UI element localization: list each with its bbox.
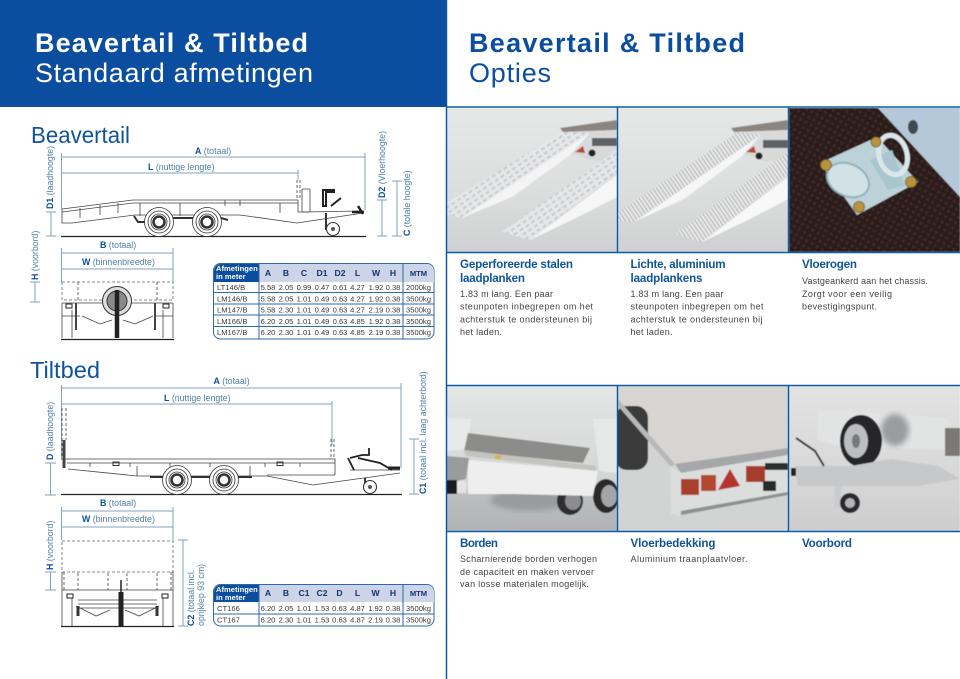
table: beavertail dimensions: A [265, 268, 271, 278]
option text: perforated steel ramps: het laden. [460, 327, 502, 337]
table: beavertail dimensions: 2000kg [406, 283, 431, 292]
table: beavertail dimensions: 0.49 [315, 328, 329, 337]
table: beavertail dimensions: C [301, 268, 307, 278]
option text: front board: Voorbord [802, 537, 852, 550]
tiltbed dimension labels: L (nuttige lengte) [164, 393, 231, 403]
table: beavertail dimensions: LM147/B [217, 306, 247, 314]
option text: floor covering: Aluminium traanplaatvloer. [630, 554, 748, 564]
dimension labels: D2 (Vloerhoogte) [377, 131, 387, 198]
table: beavertail dimensions: MTM [410, 269, 427, 278]
left header band: Beavertail & Tiltbed [35, 28, 308, 58]
table: beavertail dimensions: Afmetingen [216, 264, 258, 273]
table: beavertail dimensions: LM166/B [217, 317, 247, 326]
option text: perforated steel ramps: laadplanken [460, 272, 525, 285]
option text: perforated steel ramps: steunpoten inbegrepen om het [460, 302, 593, 312]
table: beavertail dimensions: LT146/B [217, 283, 245, 292]
table: beavertail dimensions: 0.63 [333, 317, 347, 326]
table: beavertail dimensions: 4.27 [350, 306, 365, 314]
option text: aluminium ramps: laadplankens [630, 272, 702, 285]
table: beavertail dimensions: 0.63 [333, 294, 347, 304]
tiltbed dimension labels: A (totaal) [214, 376, 250, 386]
side view dimension lines [30, 153, 402, 302]
heading: Tiltbed: Tiltbed [30, 357, 100, 383]
table: beavertail dimensions: 1.92 [369, 283, 383, 292]
table: tiltbed dimensions: 6.20 [261, 616, 275, 624]
table: tiltbed dimensions: C1 [298, 588, 310, 598]
tiltbed dimension labels: oprijklep 93 cm) [196, 564, 206, 626]
photo: aluminium ramps [618, 108, 788, 252]
table: tiltbed dimensions: 1.01 [297, 616, 311, 624]
table: tiltbed dimensions: 3500kg [406, 604, 431, 613]
tiltbed dimension labels: C2 (totaal incl. [186, 570, 196, 626]
option text: floor covering: Vloerbedekking [630, 537, 716, 550]
option text: floor eyes: Vloerogen [802, 258, 857, 271]
table: beavertail dimensions: 1.92 [369, 317, 383, 326]
option text: perforated steel ramps: 1.83 m lang. Een paar [460, 289, 553, 299]
left header band: Standaard afmetingen [35, 58, 313, 88]
table: beavertail dimensions: 0.49 [315, 317, 329, 326]
table: beavertail dimensions: 0.47 [315, 283, 329, 292]
table: tiltbed dimensions: W [371, 588, 380, 598]
heading: Beavertail: Beavertail [31, 122, 130, 148]
panel: beavertail dimensions [30, 122, 434, 340]
table: beavertail dimensions: 1.01 [297, 294, 311, 304]
table: beavertail dimensions: 0.38 [386, 317, 400, 326]
tiltbed dimension labels: C1 (totaal incl. laag achterbord) [418, 371, 428, 494]
table: beavertail dimensions: 1.01 [297, 317, 311, 326]
table: tiltbed dimensions: 4.87 [350, 616, 365, 624]
table: beavertail dimensions: 0.49 [315, 294, 329, 304]
table: tiltbed dimensions: H [390, 588, 396, 598]
option text: floor eyes: Vastgeankerd aan het chassis. [802, 276, 928, 286]
table: tiltbed dimensions: MTM [410, 589, 427, 598]
diagram: beavertail rear view [61, 282, 174, 340]
option text: aluminium ramps: steunpoten inbegrepen om het [630, 302, 764, 312]
table: beavertail dimensions: 4.27 [350, 294, 365, 304]
table: beavertail dimensions: 3500kg [406, 317, 431, 326]
option text: aluminium ramps: 1.83 m lang. Een paar [630, 289, 724, 299]
table: beavertail dimensions: 2.19 [369, 328, 383, 337]
table: beavertail dimensions: 2.05 [279, 294, 293, 304]
table: beavertail dimensions: H [390, 268, 396, 278]
table: beavertail dimensions: 3500kg [406, 306, 431, 314]
table: tiltbed dimensions: 0.63 [332, 616, 347, 624]
table: tiltbed dimensions: 0.38 [386, 616, 400, 624]
table: tiltbed dimensions: 3500kg [406, 616, 431, 624]
table: tiltbed dimensions: C2 [316, 588, 328, 598]
table: beavertail dimensions: 2.05 [279, 283, 293, 292]
table: beavertail dimensions: B [283, 268, 289, 278]
table: beavertail dimensions: D1 [316, 268, 328, 278]
table: beavertail dimensions: 1.01 [297, 328, 311, 337]
table: beavertail dimensions: W [372, 268, 381, 278]
table: tiltbed dimensions: D [336, 588, 343, 598]
option text: floor covering [630, 537, 748, 564]
table: tiltbed dimensions: 2.30 [279, 616, 293, 624]
table: beavertail dimensions: 0.38 [386, 283, 400, 292]
table: beavertail dimensions: 0.38 [386, 328, 400, 337]
right header title [469, 28, 745, 88]
photo frame lines [446, 0, 960, 679]
dimension labels [30, 131, 412, 280]
option text: side boards: Borden [460, 537, 498, 550]
table: tiltbed dimensions: 1.53 [315, 604, 329, 613]
left header band [0, 0, 446, 107]
table: beavertail dimensions: 6.20 [261, 317, 275, 326]
table: tiltbed dimensions: Afmetingen [216, 585, 258, 594]
option text: perforated steel ramps: Geperforeerde stalen [460, 258, 573, 271]
table: beavertail dimensions: 6.20 [261, 328, 275, 337]
table: beavertail dimensions [214, 264, 434, 339]
photo: floor eye [789, 107, 960, 252]
option text: floor eyes [802, 258, 928, 312]
table: beavertail dimensions: 2.19 [369, 306, 383, 314]
table: tiltbed dimensions: A [265, 588, 271, 598]
table: tiltbed dimensions: 2.05 [279, 604, 293, 613]
table: beavertail dimensions: 0.49 [315, 306, 329, 314]
option text: aluminium ramps: het laden. [630, 327, 672, 337]
option text: floor eyes: Zorgt voor een veilig [802, 289, 892, 299]
option text: aluminium ramps [630, 258, 764, 337]
option text: perforated steel ramps: achterstuk te ondersteunen bij [460, 314, 592, 324]
panel: tiltbed dimensions [30, 357, 434, 626]
table: beavertail dimensions: 2.30 [279, 306, 293, 314]
table: tiltbed dimensions: 1.53 [315, 616, 329, 624]
table: beavertail dimensions: 2.05 [279, 317, 293, 326]
table: beavertail dimensions: 0.38 [386, 294, 400, 304]
table: beavertail dimensions: 0.61 [333, 283, 347, 292]
table: beavertail dimensions: 5.58 [261, 294, 275, 304]
option text: aluminium ramps: Lichte, aluminium [630, 258, 726, 271]
table: beavertail dimensions: 3500kg [406, 328, 431, 337]
table: beavertail dimensions: L [355, 268, 360, 278]
table: beavertail dimensions: 5.58 [261, 283, 275, 292]
tiltbed dimension labels: D (laadhoogte) [45, 402, 55, 460]
dimension labels: L (nuttige lengte) [148, 162, 215, 172]
tiltbed dimension labels: H (voorbord) [45, 521, 55, 570]
table: tiltbed dimensions: CT167 [217, 616, 240, 624]
right header title: Beavertail & Tiltbed [469, 28, 745, 58]
table: beavertail dimensions: LM146/B [217, 294, 247, 304]
option text: aluminium ramps: achterstuk te ondersteunen bij [630, 314, 762, 324]
table: beavertail dimensions: LM167/B [217, 328, 247, 337]
right header title: Opties [469, 58, 551, 88]
table: beavertail dimensions: 1.01 [297, 306, 311, 314]
table: tiltbed dimensions: 4.87 [350, 604, 365, 613]
option text: side boards [460, 537, 597, 589]
photo: front board with spare wheel [789, 386, 960, 531]
table: tiltbed dimensions: 6.20 [261, 604, 275, 613]
table: beavertail dimensions: D2 [334, 268, 346, 278]
table: tiltbed dimensions: 2.19 [368, 616, 383, 624]
option text: side boards: Scharnierende borden verhogen [460, 554, 597, 564]
tiltbed dimension labels: B (totaal) [100, 498, 136, 508]
table: tiltbed dimensions: L [355, 588, 360, 598]
photo: aluminium floor covering [615, 386, 788, 531]
table: beavertail dimensions: 0.63 [333, 328, 347, 337]
dimension labels: A (totaal) [195, 146, 231, 156]
table: tiltbed dimensions: CT166 [217, 604, 240, 613]
table: tiltbed dimensions: 1.92 [368, 604, 383, 613]
dimension labels: W (binnenbreedte) [82, 257, 155, 267]
table: beavertail dimensions: 3500kg [406, 294, 431, 304]
table: tiltbed dimensions: 0.63 [332, 604, 347, 613]
option text: floor eyes: bevestigingspunt. [802, 302, 877, 312]
diagram: tiltbed side view [61, 408, 402, 494]
table: tiltbed dimensions: in meter [216, 593, 246, 602]
table: beavertail dimensions: 0.63 [333, 306, 347, 314]
table: tiltbed dimensions: 1.01 [297, 604, 311, 613]
diagram: beavertail side view [61, 180, 366, 236]
table: beavertail dimensions: 4.85 [350, 328, 365, 337]
photo: perforated steel ramps [446, 108, 617, 252]
table: beavertail dimensions: 5.58 [261, 306, 275, 314]
table: beavertail dimensions: 4.27 [350, 283, 365, 292]
dimension labels: H (voorbord) [30, 231, 40, 280]
table: beavertail dimensions: 1.92 [369, 294, 383, 304]
option text: perforated steel ramps [460, 258, 593, 337]
tiltbed dimension labels: W (binnenbreedte) [82, 514, 155, 524]
table: beavertail dimensions: in meter [216, 272, 246, 281]
dimension labels: D1 (laadhoogte) [45, 146, 55, 209]
table: beavertail dimensions: 4.85 [350, 317, 365, 326]
table: beavertail dimensions: 0.99 [297, 283, 311, 292]
tiltbed dimension labels [45, 371, 428, 626]
tiltbed dimension lines [45, 383, 419, 626]
table: tiltbed dimensions: B [283, 588, 289, 598]
option text: side boards: van losse materialen mogelijk. [460, 579, 589, 589]
photo: hinged side boards [446, 386, 619, 531]
table: beavertail dimensions: 2.30 [279, 328, 293, 337]
table: beavertail dimensions: 0.38 [386, 306, 400, 314]
table: tiltbed dimensions [214, 584, 434, 626]
table: tiltbed dimensions: 0.38 [386, 604, 400, 613]
dimension labels: C (totale hoogte) [402, 170, 412, 236]
dimension labels: B (totaal) [100, 240, 136, 250]
diagram: tiltbed rear view [61, 541, 174, 626]
option text: side boards: de capaciteit en maken vervoer [460, 567, 594, 577]
